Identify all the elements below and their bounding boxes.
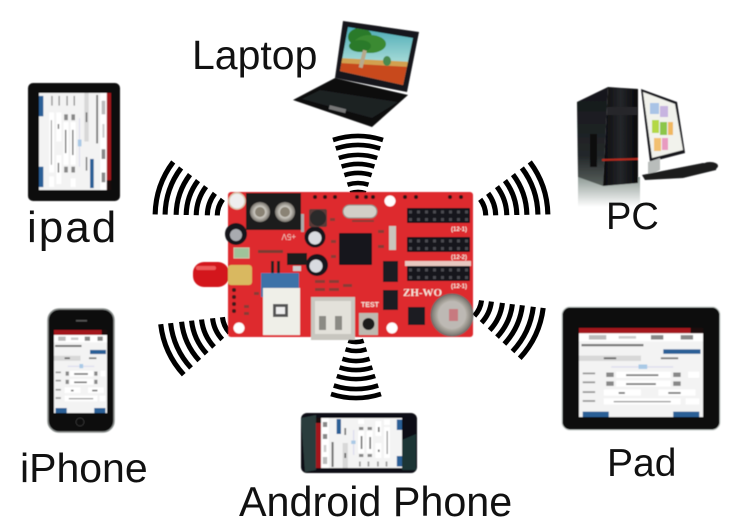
board substrate (228, 192, 473, 337)
side crystal (389, 226, 396, 250)
antenna connector (193, 262, 252, 287)
test button (359, 313, 378, 335)
tower front (603, 87, 638, 186)
laptop lid (335, 21, 419, 92)
controller circuit board: TEST (361, 302, 380, 309)
label: ipad: ipad (27, 203, 118, 252)
signal wave: upper left (151, 161, 229, 234)
label: iPhone: iPhone (20, 445, 148, 491)
label: PC: PC (606, 196, 659, 238)
keyboard and mouse (642, 163, 717, 180)
tower drive bay (607, 107, 637, 115)
power LED and regulator (234, 248, 307, 271)
signal wave: lower left (157, 300, 237, 377)
mounting holes (229, 193, 398, 334)
android phone device (301, 413, 417, 473)
wifi module (261, 261, 300, 335)
top pin row (313, 195, 463, 199)
desktop pc (577, 87, 718, 207)
output headers (405, 208, 471, 281)
laptop wallpaper (339, 26, 414, 86)
pad screen (579, 328, 703, 417)
controller circuit board: +5V (281, 232, 296, 241)
controller circuit board (193, 192, 473, 340)
laptop base (293, 78, 408, 127)
header labels (451, 227, 467, 290)
small surface-mount parts (244, 218, 384, 315)
power terminal block (246, 193, 304, 232)
main processor chip (339, 233, 372, 265)
signal wave: bottom (331, 341, 381, 398)
pc reflection (578, 177, 640, 207)
iphone device (48, 309, 114, 432)
android screen (316, 418, 402, 468)
header labels: (12-1) (451, 284, 467, 290)
iphone speaker (76, 320, 87, 322)
ipad device (28, 83, 120, 201)
header labels: (12-1) (451, 227, 467, 233)
signal wave: lower right (466, 283, 547, 360)
ipad screen (39, 93, 111, 190)
side vent (590, 134, 597, 167)
iphone home button (76, 418, 84, 426)
label: Laptop: Laptop (192, 32, 317, 78)
pad body (562, 307, 720, 430)
signal wave: top (333, 136, 383, 193)
crystal oscillator (343, 205, 377, 218)
label: Pad: Pad (607, 442, 676, 485)
board labels: ZH-WO (403, 287, 443, 299)
iphone screen (54, 330, 107, 413)
label: Android Phone: Android Phone (239, 479, 512, 525)
tower red stripe (602, 158, 638, 161)
capacitors (225, 209, 328, 276)
signal wave: upper right (474, 161, 552, 234)
ipad body (28, 83, 120, 201)
iphone body (48, 309, 114, 432)
monitor stand (648, 158, 660, 176)
header labels: (12-2) (451, 255, 467, 261)
coin battery holder (431, 294, 473, 336)
monitor (641, 89, 685, 162)
usb port (311, 297, 355, 340)
android body (301, 413, 417, 473)
pad device (562, 307, 720, 430)
side pins (232, 288, 236, 313)
laptop (293, 21, 419, 127)
tower side (577, 87, 608, 186)
driver chips (383, 261, 425, 325)
